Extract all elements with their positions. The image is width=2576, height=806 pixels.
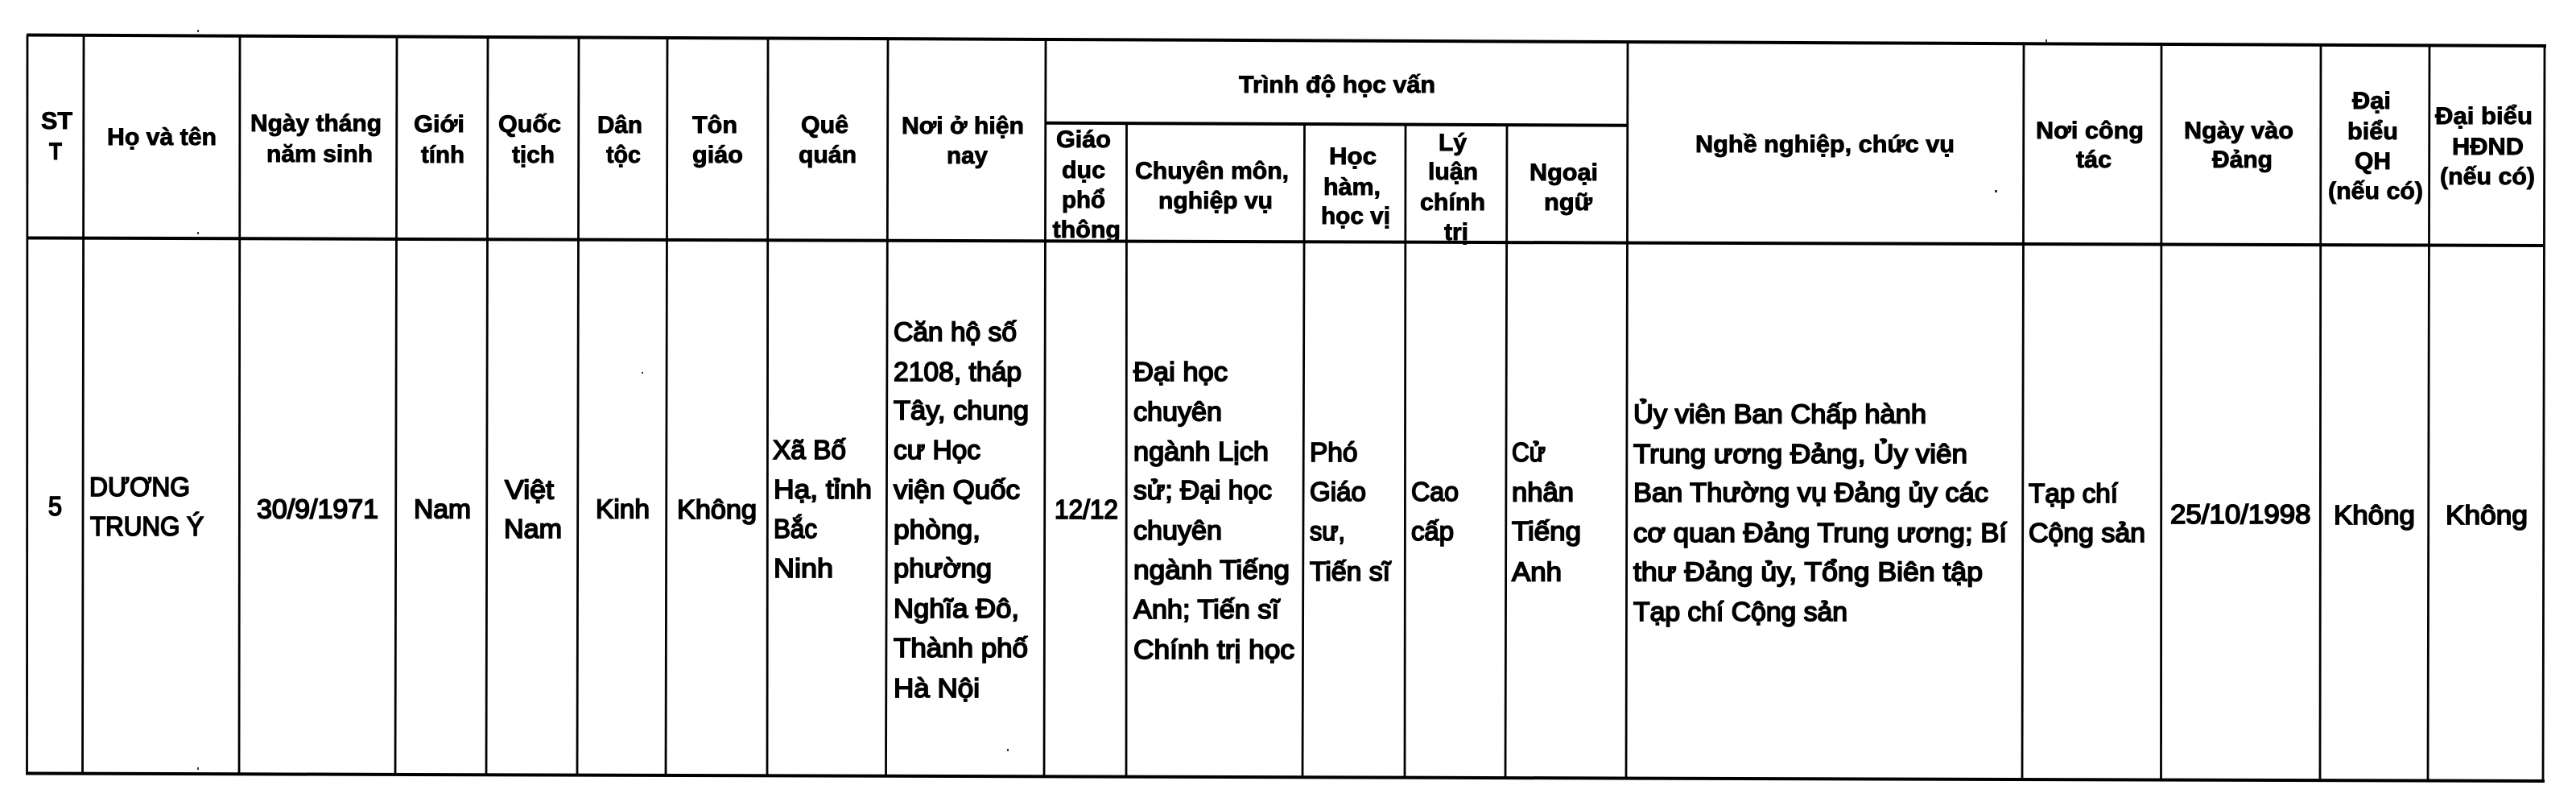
header: academic title and degree: hàm, — [1323, 174, 1381, 200]
cell: name — [89, 472, 204, 541]
cell: foreign language: Anh — [1512, 557, 1562, 586]
cell: occupation and position: Trung ương Đảng, Ủy viên — [1633, 439, 1967, 469]
cell: nationality: Nam — [504, 514, 562, 544]
header: education level group: Trình độ học vấn — [1239, 72, 1435, 98]
cell: occupation and position: Tạp chí Cộng sản — [1633, 597, 1847, 626]
header: political theory: trị — [1444, 219, 1468, 246]
header row — [41, 72, 2535, 246]
header: national assembly delegate: (nếu có) — [2328, 178, 2423, 205]
header: specialization — [1135, 158, 1289, 214]
header: political theory: chính — [1420, 189, 1485, 216]
header: party admission date: Ngày vào — [2184, 118, 2293, 144]
cell: specialization: chuyên — [1133, 396, 1222, 427]
header: current residence: nay — [947, 143, 988, 169]
cell: date of birth: 30/9/1971 — [257, 494, 378, 523]
header: occupation and position: Nghề nghiệp, chức vụ — [1695, 131, 1955, 158]
header: academic title and degree: Học — [1329, 143, 1377, 170]
header: nationality — [498, 111, 561, 168]
header: gender: Giới — [414, 111, 464, 138]
cell: occupation and position: Ủy viên Ban Chấp hành — [1633, 399, 1926, 428]
cell: academic title and degree: Giáo — [1310, 477, 1366, 506]
cell: workplace — [2029, 478, 2145, 548]
header: party admission date — [2184, 118, 2293, 173]
header: foreign language: ngữ — [1544, 189, 1592, 216]
header: gender: tính — [421, 142, 464, 168]
cell: hometown: Xã Bố — [773, 435, 846, 465]
header: specialization: nghiệp vụ — [1158, 188, 1273, 214]
cell: religion: Không — [677, 494, 757, 524]
cell: academic title and degree: sư, — [1310, 516, 1345, 546]
header: academic title and degree — [1321, 143, 1390, 229]
header: STT: T — [49, 138, 62, 165]
cell: party admission date: 25/10/1998 — [2170, 499, 2310, 529]
cell: foreign language: nhân — [1512, 477, 1574, 507]
header: current residence — [902, 113, 1024, 169]
data row — [48, 317, 2528, 703]
header: religion — [692, 112, 743, 168]
cell: current residence: cư Học — [894, 435, 980, 465]
cell: current residence: Thành phố — [894, 633, 1028, 663]
cell: foreign language: Tiếng — [1512, 516, 1581, 546]
header: date of birth: Ngày tháng — [250, 110, 382, 137]
header: workplace: Nơi công — [2036, 118, 2144, 144]
cell: specialization: sử; Đại học — [1133, 475, 1272, 505]
header: religion: giáo — [692, 142, 743, 168]
cell: academic title and degree — [1310, 437, 1392, 586]
header: ethnicity — [597, 112, 642, 168]
cell: specialization: ngành Tiếng — [1133, 555, 1290, 585]
cell: general education: 12/12 — [1055, 494, 1118, 524]
cell: current residence — [894, 317, 1029, 703]
header: party admission date: Đảng — [2212, 147, 2273, 173]
header: academic title and degree: học vị — [1321, 203, 1390, 229]
cell: occupation and position — [1633, 399, 2007, 626]
header: ethnicity: Dân — [597, 112, 642, 138]
cell: occupation and position: thư Đảng ủy, Tổng Biên tập — [1633, 557, 1983, 586]
header: STT — [41, 108, 72, 165]
cell: academic title and degree: Phó — [1310, 437, 1357, 467]
header: workplace: tác — [2076, 147, 2112, 173]
cell: hometown: Hạ, tỉnh — [774, 474, 872, 504]
cell: political theory: Cao — [1411, 477, 1459, 506]
header: national assembly delegate: biểu — [2347, 118, 2398, 145]
cell: specialization: chuyên — [1133, 515, 1222, 545]
cell: hometown: Bắc — [774, 514, 817, 544]
header: general education: dục — [1062, 157, 1105, 184]
cell: current residence: 2108, tháp — [894, 357, 1022, 386]
cell: workplace: Tạp chí — [2029, 478, 2118, 508]
cell: occupation and position: Ban Thường vụ Đảng ủy các — [1633, 477, 1988, 507]
header: foreign language: Ngoại — [1530, 159, 1598, 186]
header: gender — [414, 111, 464, 168]
header: general education: thông — [1053, 217, 1121, 243]
cell: current residence: Nghĩa Đô, — [894, 593, 1019, 623]
cell: hometown: Ninh — [774, 553, 833, 583]
header: date of birth — [250, 110, 382, 167]
cell: current residence: Tây, chung — [894, 395, 1029, 425]
header: hometown: quán — [799, 142, 857, 168]
cell: political theory — [1411, 477, 1459, 546]
header: general education: phổ — [1062, 187, 1105, 213]
cell: foreign language: Cử — [1512, 437, 1546, 467]
cell: index: 5 — [48, 491, 62, 521]
header: people's council delegate: (nếu có) — [2440, 163, 2535, 190]
cell: specialization: Chính trị học — [1133, 634, 1294, 664]
header: date of birth: năm sinh — [266, 141, 373, 167]
cell: nationality — [504, 475, 562, 544]
cell: ethnicity: Kinh — [596, 494, 650, 523]
header: hometown — [799, 112, 857, 168]
header: STT: ST — [41, 108, 72, 134]
header: nationality: tịch — [512, 142, 555, 168]
header: political theory — [1420, 130, 1485, 246]
header: national assembly delegate: QH — [2355, 148, 2391, 175]
header: nationality: Quốc — [498, 111, 561, 138]
header: general education — [1053, 126, 1121, 243]
header: political theory: Lý — [1439, 130, 1467, 156]
header: full name: Họ và tên — [107, 124, 217, 151]
cell: people's council delegate: Không — [2446, 500, 2528, 530]
header: national assembly delegate — [2328, 88, 2423, 205]
cell: academic title and degree: Tiến sĩ — [1310, 556, 1392, 586]
header: national assembly delegate: Đại — [2352, 88, 2391, 114]
cell: workplace: Cộng sản — [2029, 518, 2145, 548]
header: political theory: luận — [1428, 159, 1478, 185]
header: specialization: Chuyên môn, — [1135, 158, 1289, 184]
header: general education: Giáo — [1056, 126, 1111, 153]
cell: specialization — [1133, 357, 1294, 664]
cell: current residence: phường — [894, 553, 992, 583]
cell: political theory: cấp — [1411, 516, 1454, 546]
cell: nationality: Việt — [505, 475, 554, 504]
header: people's council delegate — [2435, 103, 2535, 190]
cell: specialization: ngành Lịch — [1133, 436, 1269, 466]
cell: current residence: Hà Nội — [894, 673, 980, 703]
cell: national assembly delegate: Không — [2334, 500, 2415, 530]
header: ethnicity: tộc — [606, 142, 641, 168]
cell: specialization: Anh; Tiến sĩ — [1133, 594, 1281, 624]
cell: specialization: Đại học — [1133, 357, 1228, 386]
header: foreign language — [1530, 159, 1598, 216]
header: hometown: Quê — [801, 112, 848, 138]
header: workplace — [2036, 118, 2144, 173]
cell: current residence: Căn hộ số — [894, 317, 1017, 346]
header: people's council delegate: Đại biểu — [2435, 103, 2533, 130]
cell: hometown — [773, 435, 872, 583]
cell: foreign language — [1512, 437, 1581, 586]
cell: name: DƯƠNG — [89, 472, 190, 502]
header: people's council delegate: HĐND — [2452, 134, 2524, 160]
header: religion: Tôn — [692, 112, 737, 138]
cell: gender: Nam — [414, 494, 471, 523]
cell: name: TRUNG Ý — [90, 511, 204, 541]
cell: current residence: viện Quốc — [894, 475, 1020, 504]
cell: current residence: phòng, — [894, 515, 980, 544]
header: current residence: Nơi ở hiện — [902, 113, 1024, 139]
cell: occupation and position: cơ quan Đảng Trung ương; Bí — [1633, 518, 2007, 548]
